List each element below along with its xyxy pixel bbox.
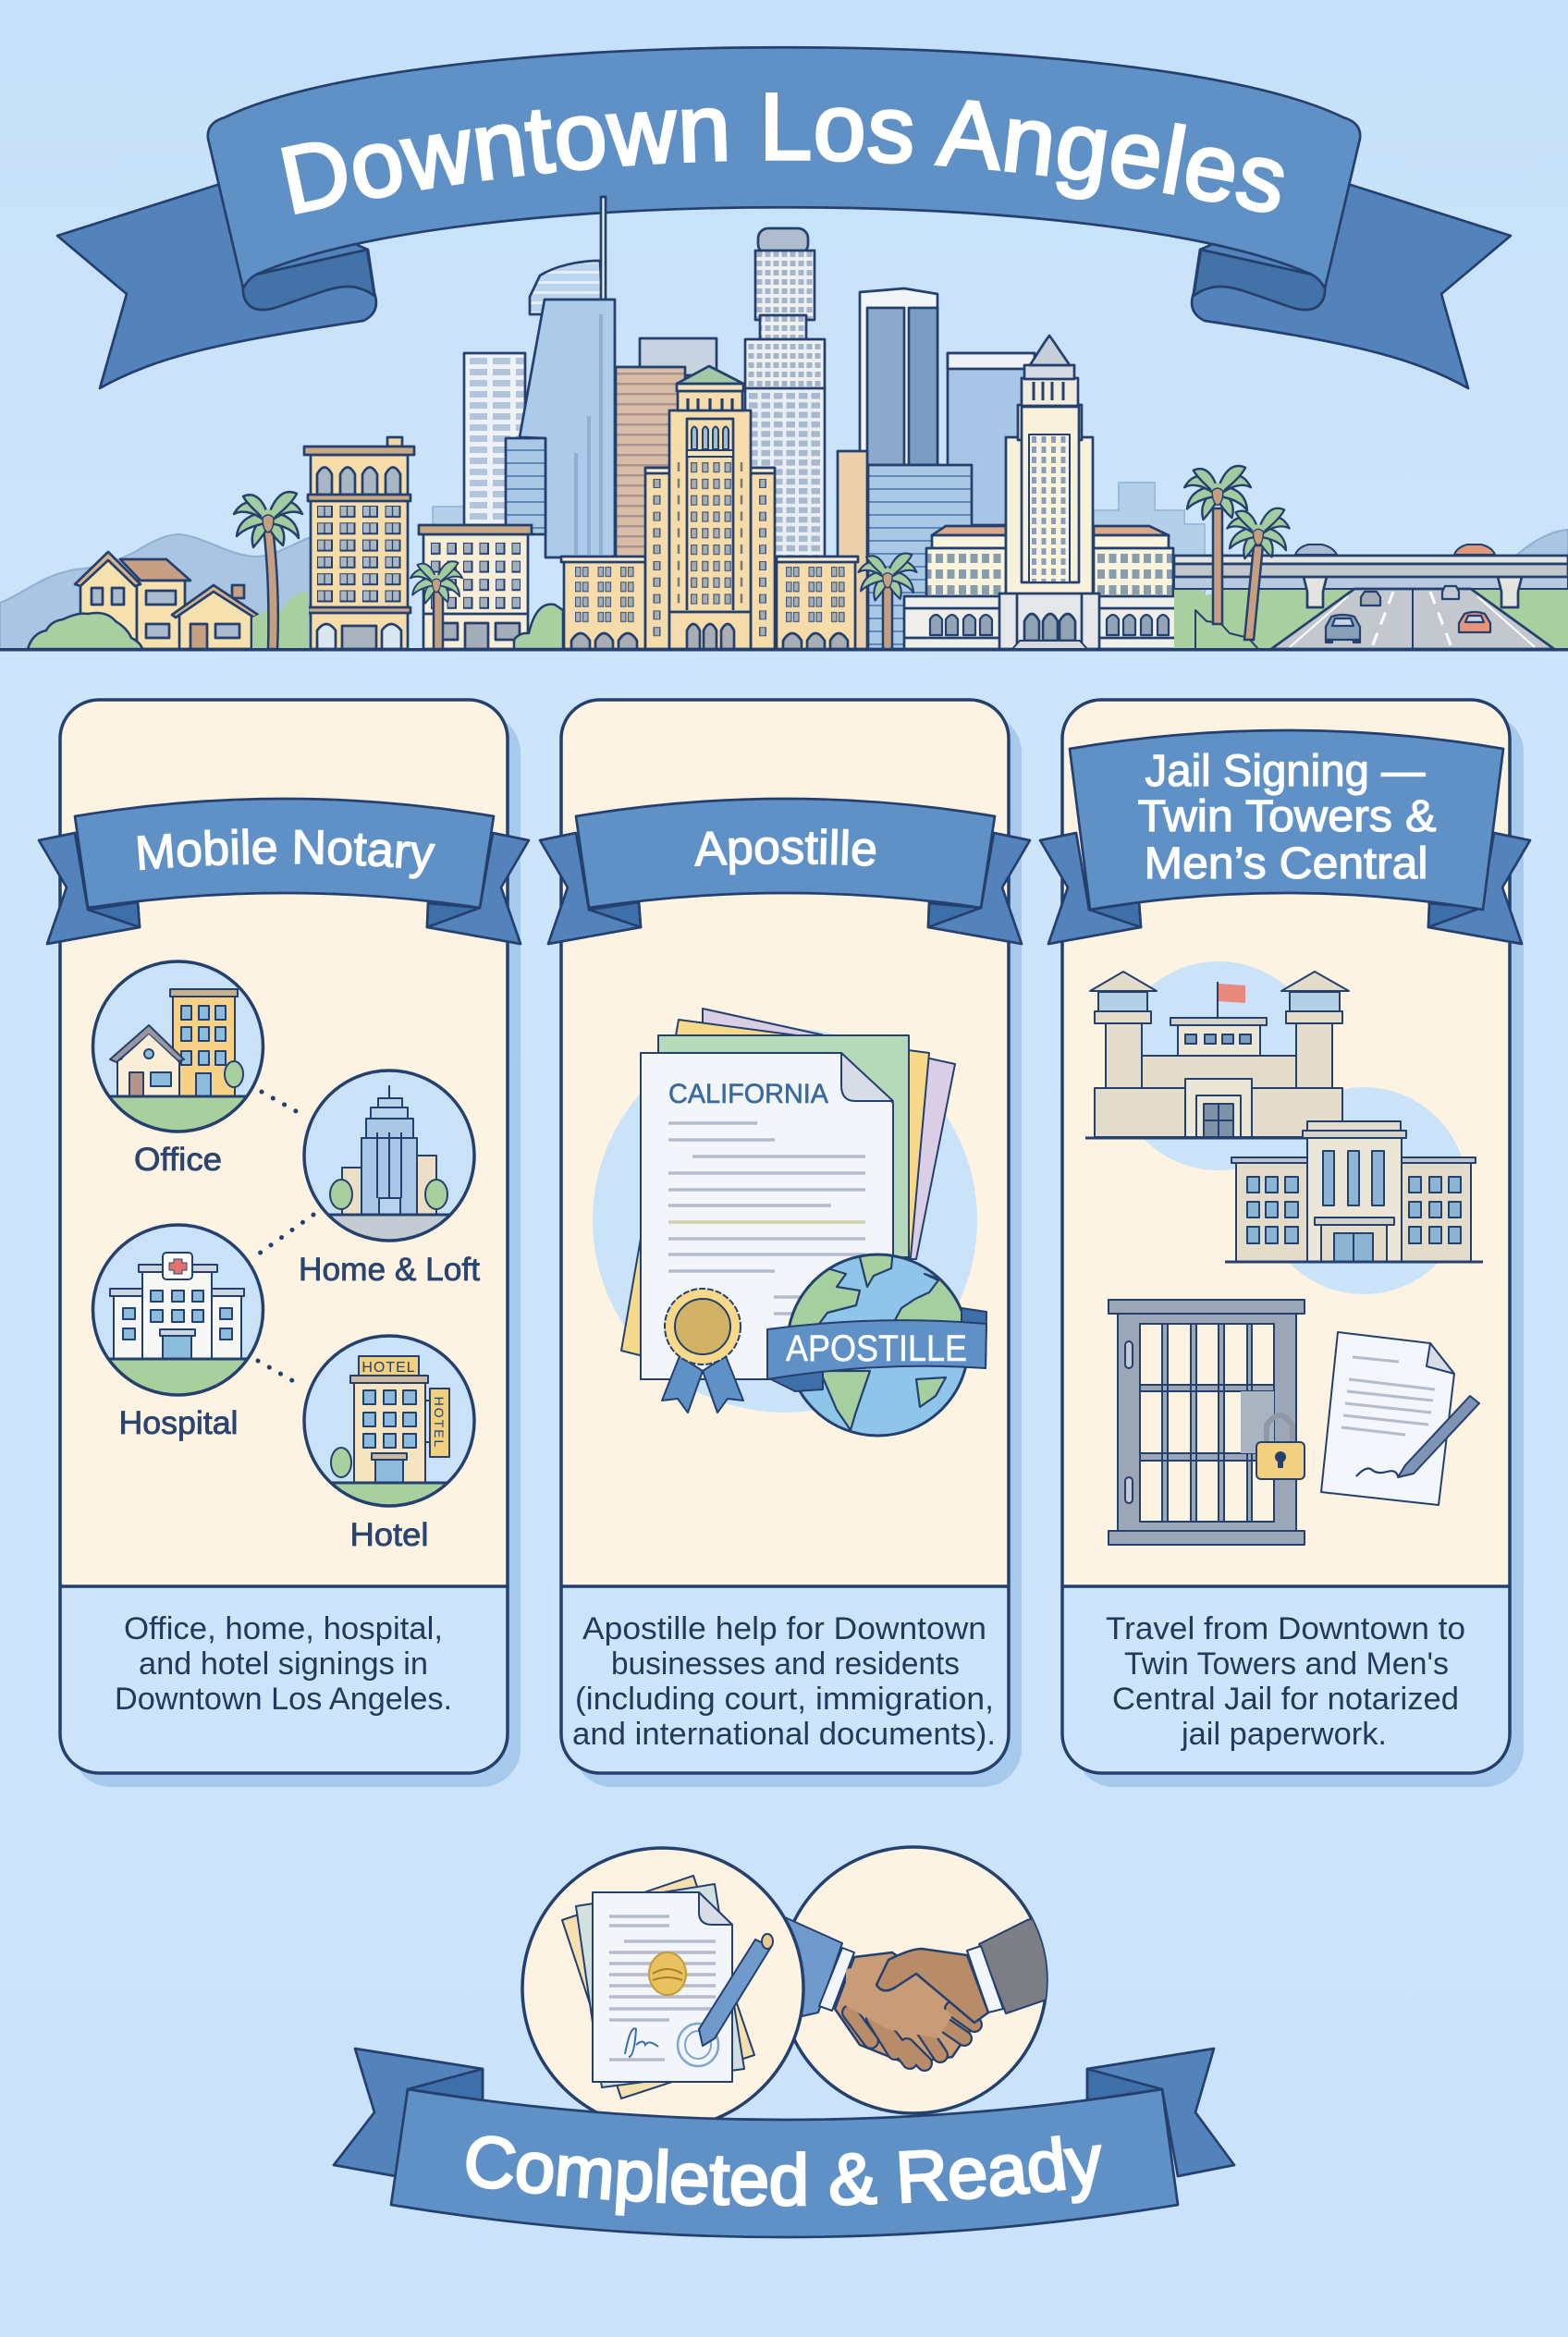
document text: CALIFORNIA [668, 1079, 828, 1109]
card body [60, 700, 508, 1773]
left sleeve [777, 1914, 842, 2020]
label: Hospital [118, 1405, 239, 1441]
connector dots [255, 1092, 313, 1386]
ribbon heading: Jail Signing — [1145, 747, 1426, 796]
description: (including court, immigration, [575, 1682, 994, 1717]
card shadow [573, 714, 1022, 1787]
description area [1062, 1586, 1510, 1773]
ribbon heading: Twin Towers & [1137, 792, 1437, 841]
houses [75, 552, 258, 649]
icon: hotel circle: HOTEL [432, 1397, 447, 1449]
description: jail paperwork. [1181, 1717, 1387, 1752]
icon: completed documents circle [522, 1848, 803, 2129]
card outline [1062, 700, 1510, 1773]
distant blocks [433, 483, 1205, 649]
icon: hospital circle [83, 1225, 277, 1441]
main body [669, 410, 751, 612]
icon: globe with ribbon: APOSTILLE [786, 1328, 967, 1369]
skyline [0, 197, 1568, 651]
ribbon heading: Men’s Central [1145, 839, 1427, 888]
ribbon heading [37, 797, 531, 945]
lower wings [564, 560, 645, 649]
cuffs [819, 1946, 1003, 2013]
apartment building [419, 525, 532, 649]
icon: cell door with padlock [1109, 1300, 1305, 1545]
side wings [645, 468, 669, 649]
description area [60, 1586, 508, 1773]
ribbon heading [1040, 730, 1530, 944]
description: Twin Towers and Men's [1124, 1646, 1449, 1682]
icon: hotel circle [302, 1334, 476, 1547]
back towers [464, 197, 1035, 649]
base with arches [669, 612, 751, 649]
card shadow [1075, 714, 1524, 1787]
closing banner [333, 2047, 1235, 2239]
panel: apostille [538, 698, 1032, 1787]
title text: Downtown Los Angeles [281, 92, 1284, 214]
card body [561, 700, 1009, 1773]
cars [1326, 586, 1490, 642]
icon: hotel circle: HOTEL [361, 1360, 416, 1376]
description: Travel from Downtown to [1106, 1611, 1465, 1646]
label: Hotel [349, 1517, 429, 1553]
card outline [60, 700, 508, 1773]
closing text: Completed & Ready [466, 2135, 1102, 2216]
icon: office circle [91, 960, 264, 1171]
freeway [1174, 544, 1568, 649]
palm trees [234, 466, 1290, 649]
icon: jail building [1085, 972, 1349, 1138]
description: and hotel signings in [139, 1646, 428, 1682]
card shadow [72, 714, 521, 1787]
title banner [55, 46, 1513, 390]
description: Downtown Los Angeles. [115, 1682, 452, 1717]
hills [0, 530, 1568, 649]
central beige tower [561, 366, 858, 649]
ribbon heading: Apostille [693, 828, 876, 875]
icon: handshake circle [777, 1847, 1054, 2113]
office building [304, 437, 414, 649]
city hall [904, 336, 1195, 649]
right sleeve [978, 1918, 1047, 2014]
icon: mens central building [1225, 1121, 1483, 1262]
document text [668, 1079, 865, 1314]
card outline [561, 700, 1009, 1773]
hands [835, 1949, 988, 2063]
description: Office, home, hospital, [124, 1611, 443, 1646]
description: Apostille help for Downtown [582, 1611, 986, 1646]
panel: jail signing [1040, 700, 1530, 1787]
description area [561, 1586, 1009, 1773]
panel: mobile notary [37, 698, 531, 1787]
pale circles [1114, 961, 1467, 1294]
document stack [621, 1009, 955, 1379]
ribbon heading [538, 797, 1032, 945]
description: Central Jail for notarized [1112, 1682, 1459, 1717]
description: businesses and residents [611, 1646, 960, 1682]
ribbon heading: Mobile Notary [137, 828, 436, 879]
icon: gold seal [662, 1289, 743, 1413]
card body [1062, 700, 1510, 1773]
icon: high-rise circle [296, 1071, 490, 1288]
icon: signed document and pen [1321, 1332, 1479, 1505]
icon: globe with ribbon [767, 1250, 986, 1436]
bushes and grass [28, 580, 1568, 649]
ground line [0, 648, 1568, 651]
label: Office [134, 1142, 222, 1178]
label: Home & Loft [299, 1252, 480, 1288]
description: and international documents). [572, 1717, 996, 1752]
pale circle [593, 1028, 977, 1413]
